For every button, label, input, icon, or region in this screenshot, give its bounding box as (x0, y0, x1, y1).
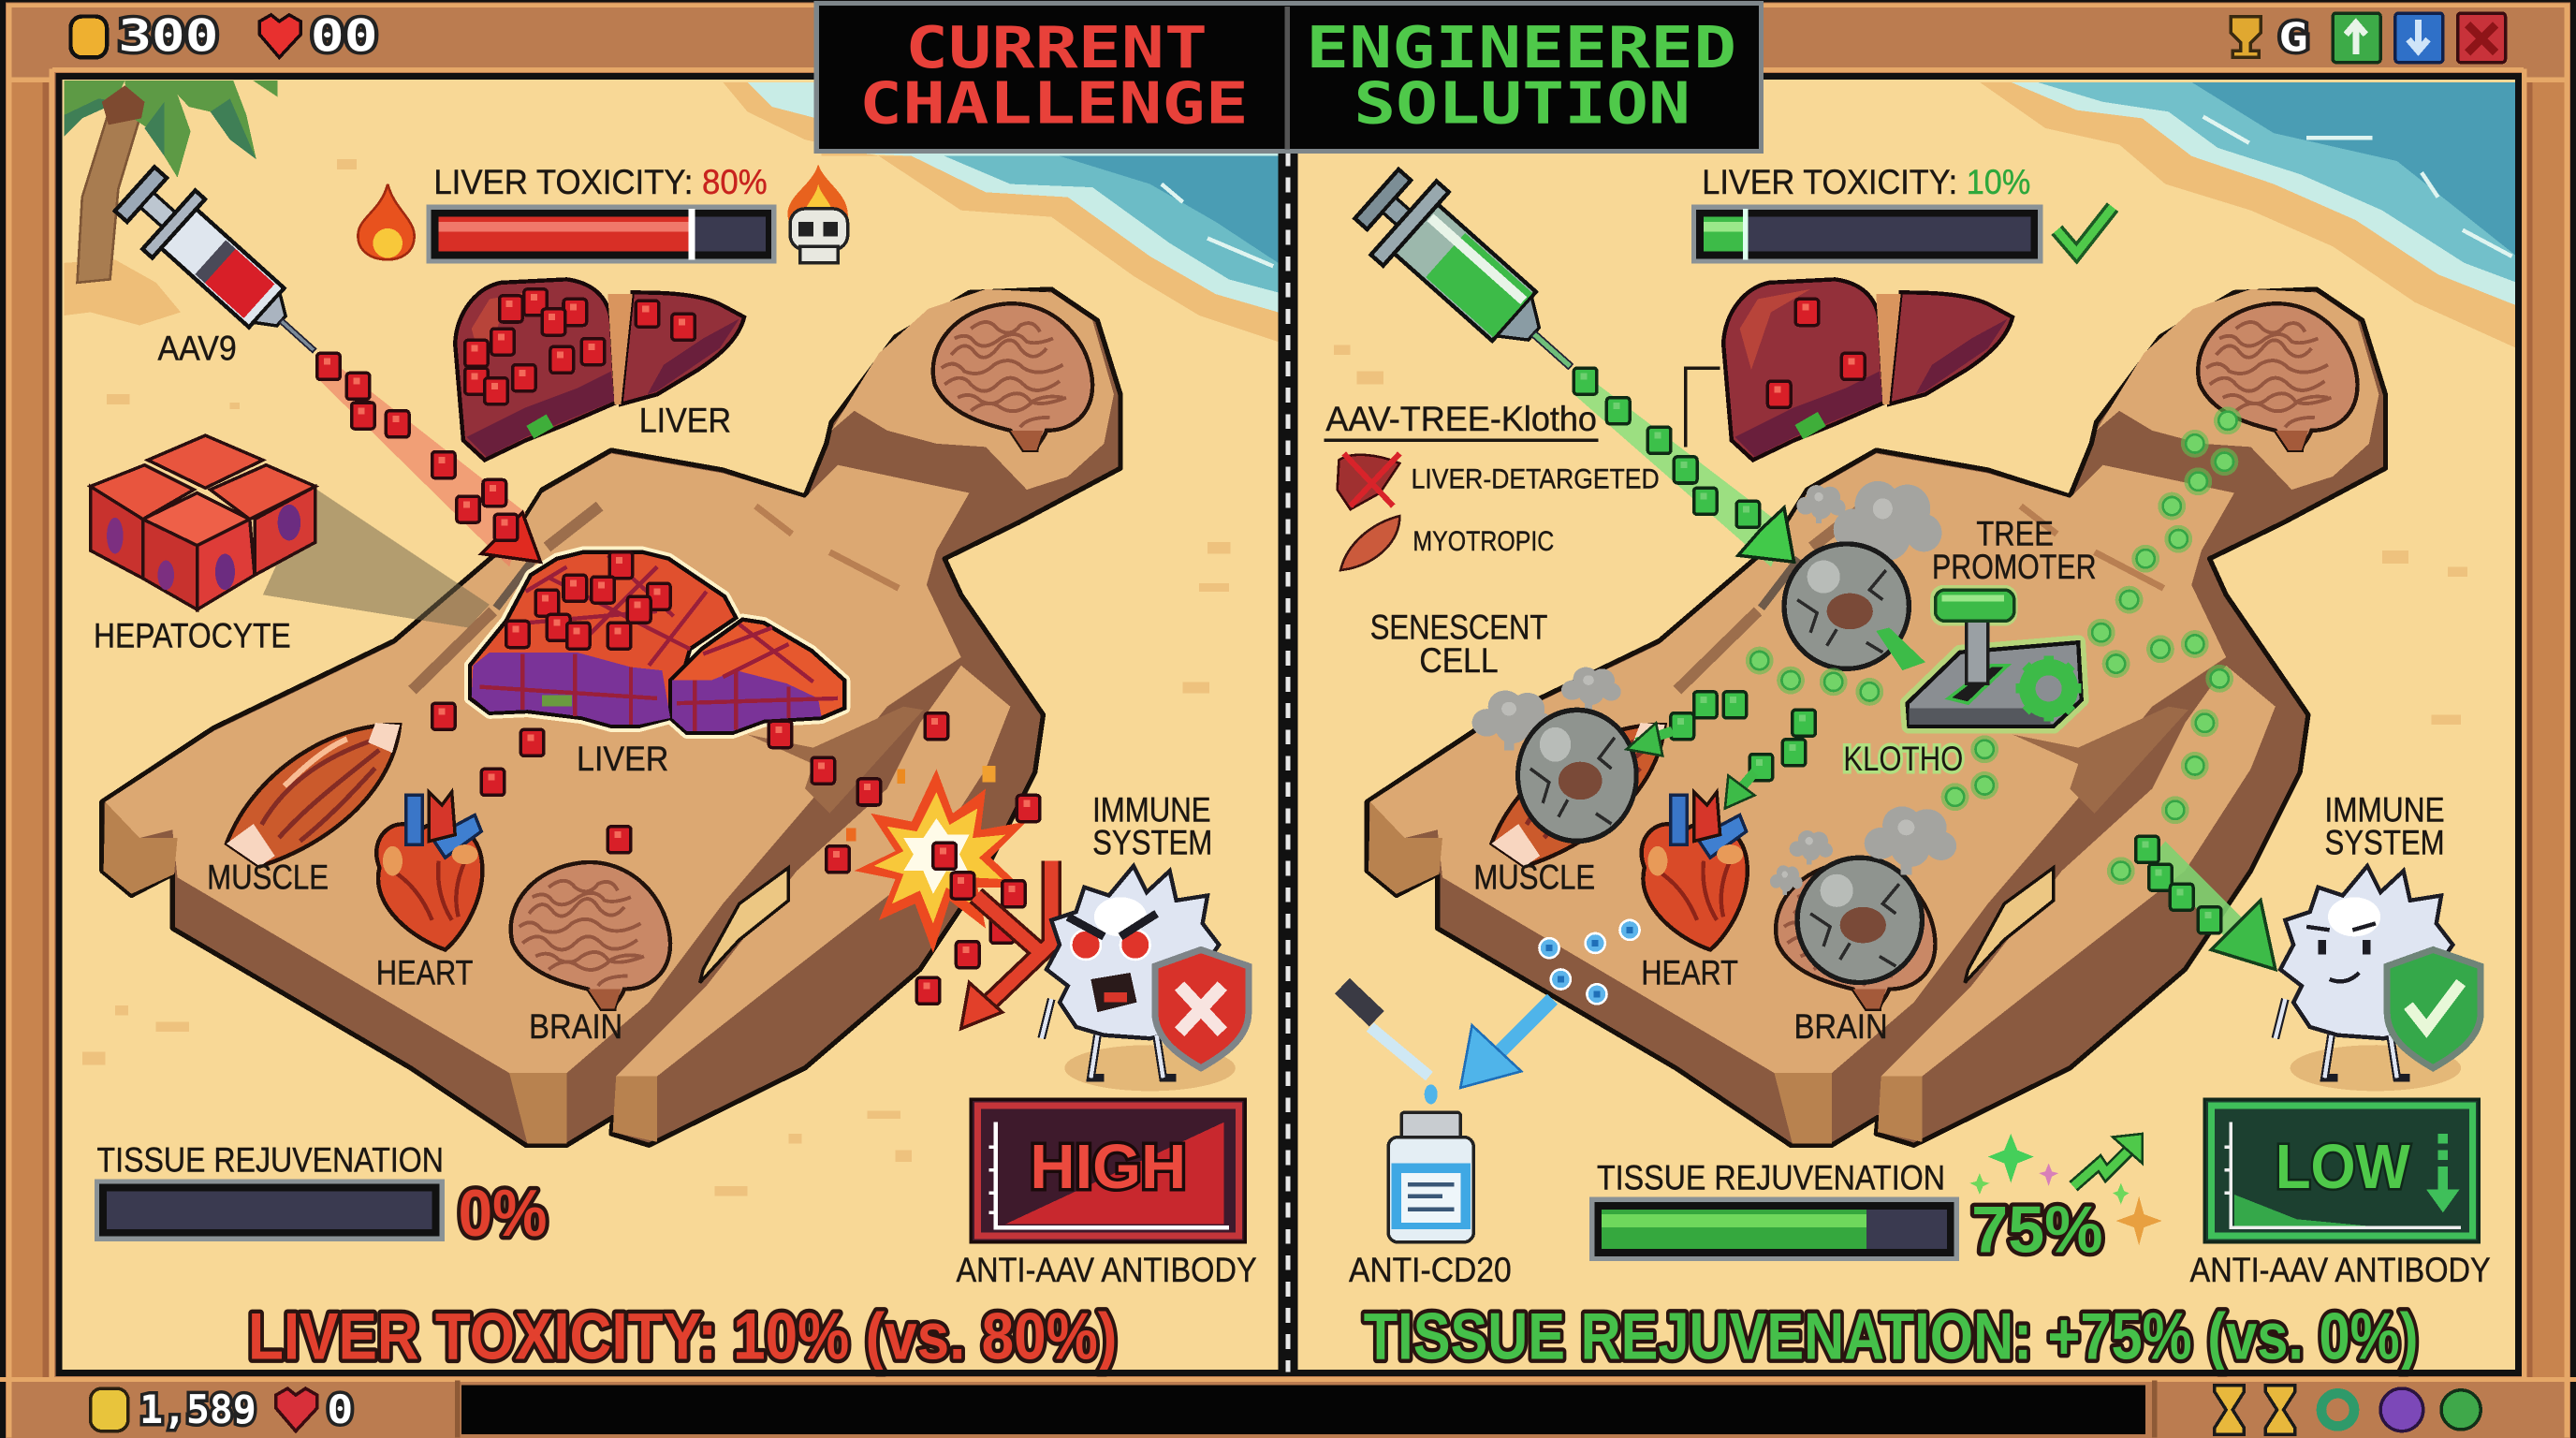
virus dots trail (317, 353, 506, 522)
label: anti-aav antibody: ANTI-AAV ANTIBODY (2190, 1251, 2491, 1289)
header: current challenge: CHALLENGE (859, 71, 1249, 138)
header: current challenge: CURRENT (905, 15, 1208, 81)
liver toxicity readout: LIVER TOXICITY: 10% (1702, 163, 2030, 201)
label: muscle: MUSCLE (1473, 858, 1595, 897)
tree promoter label (1932, 515, 2097, 586)
high antibody panel (971, 1099, 1245, 1242)
label: immune system: SYSTEM (2324, 824, 2445, 862)
immune shadow (2291, 1045, 2461, 1091)
blue arrow (1460, 999, 1553, 1088)
body, challenge panel (102, 289, 1120, 1145)
button: close (2458, 13, 2506, 63)
label: senescent cell (1370, 609, 1547, 680)
label: liver: LIVER (639, 402, 731, 440)
header: engineered solution: SOLUTION (1354, 71, 1690, 138)
senescent cell on muscle (1518, 710, 1636, 841)
low antibody panel (2204, 1099, 2479, 1242)
syringe AAV9 (109, 160, 341, 380)
takeaway: liver toxicity: LIVER TOXICITY: 10% (vs. 80%) (248, 1299, 1117, 1372)
muscle (205, 712, 430, 876)
senescent cell on brain (1797, 858, 1922, 983)
high antibody panel: HIGH (1030, 1133, 1186, 1202)
red rejection arrow (961, 861, 1051, 1029)
label: liver on body: LIVER (577, 740, 668, 778)
calm immune cell (2276, 866, 2452, 1078)
rejuvenation bar 0% (97, 1181, 442, 1239)
label: tissue rejuvenation: TISSUE REJUVENATION (1597, 1159, 1945, 1197)
header: current challenge (859, 15, 1249, 138)
label: muscle: MUSCLE (207, 858, 329, 897)
green arrow to immune cell (2136, 836, 2276, 970)
icon: liver crossed (1338, 453, 1399, 509)
icon: heart (276, 1388, 317, 1431)
tree promoter label: PROMOTER (1932, 548, 2097, 586)
label: immune system: SYSTEM (1092, 824, 1212, 862)
klotho dots (1671, 406, 2242, 885)
top hud right (2231, 13, 2506, 63)
takeaway: tissue rejuvenation: TISSUE REJUVENATION: +75% (vs. 0%) (1364, 1299, 2419, 1372)
icon: flaming skull (787, 165, 848, 263)
damaged liver on body (470, 552, 844, 733)
panel: current challenge (61, 79, 1281, 1372)
header: engineered solution (1306, 15, 1736, 138)
vial anti-cd20 (1388, 1112, 1473, 1242)
senescent cell upper (1784, 544, 1909, 668)
label: immune system (2324, 791, 2445, 862)
brain in head (2198, 303, 2358, 450)
label: tissue rejuvenation: TISSUE REJUVENATION (97, 1140, 444, 1179)
label: anti-aav antibody: ANTI-AAV ANTIBODY (956, 1251, 1257, 1289)
smoke clouds lower (1770, 806, 1956, 895)
icon: trophy (2231, 17, 2261, 57)
icon: muscle small (1340, 516, 1399, 570)
green beam (1573, 381, 1788, 567)
button: down (2395, 13, 2443, 63)
icon: check fill (2056, 207, 2113, 253)
label: immune system: IMMUNE (1092, 791, 1211, 829)
label: hepatocyte: HEPATOCYTE (94, 617, 291, 655)
heart (1642, 792, 1748, 949)
header: engineered solution: ENGINEERED (1306, 15, 1736, 81)
red dots scattered (432, 703, 1040, 1004)
connector line (1686, 368, 1720, 447)
syringe green (1344, 157, 1603, 404)
0 percent: 0% (459, 1176, 547, 1250)
bottom hud (91, 1386, 2481, 1434)
beach and sea, left panel (64, 82, 1278, 342)
icon: heart (259, 15, 300, 57)
sparkles and trend arrow (1969, 1134, 2162, 1245)
muscle (1470, 712, 1695, 876)
arrow into liver (481, 513, 540, 562)
rejuvenation bar 75% (1592, 1199, 1956, 1258)
button: up (2333, 13, 2380, 63)
virus dots in liver (506, 552, 670, 649)
icon: coin (91, 1388, 128, 1431)
immune shadow (1064, 1045, 1236, 1091)
label: brain: BRAIN (1794, 1007, 1888, 1046)
header banner (816, 4, 1761, 151)
explosion (846, 766, 1027, 953)
panel: engineered solution (1295, 79, 2519, 1372)
liver toxicity readout: LIVER TOXICITY: 80% (433, 163, 768, 201)
75 percent: 75% (1971, 1192, 2103, 1266)
icon: hourglass (2215, 1386, 2244, 1434)
score 300: 300 (118, 10, 218, 62)
beach and sea, right panel (1980, 82, 2517, 348)
label: senescent cell: CELL (1419, 641, 1499, 680)
icon: ring (2321, 1393, 2354, 1426)
score 1,589: 1,589 (139, 1387, 256, 1432)
brain (511, 862, 670, 1009)
label: AAV9: AAV9 (157, 329, 237, 367)
shield with x (1155, 949, 1249, 1068)
tree promoter label: TREE (1976, 515, 2054, 553)
icon: purple orb (2380, 1388, 2423, 1431)
green arrow head (1738, 507, 1794, 562)
green vector dots (1573, 368, 1760, 527)
label: myotropic: MYOTROPIC (1412, 526, 1554, 557)
green arrow from switch to cell (1876, 627, 1925, 670)
label: immune system: IMMUNE (2324, 791, 2445, 829)
sand specks (82, 159, 1231, 1196)
label: brain: BRAIN (529, 1007, 622, 1046)
upper liver with few dots (1723, 279, 2012, 460)
liver toxicity bar 10% (1694, 207, 2041, 261)
liver toxicity bar 80% (429, 207, 774, 261)
hepatocyte cubes (91, 435, 315, 609)
hepatocyte shadow (263, 487, 490, 627)
icon: hourglass 2 (2265, 1386, 2295, 1434)
heart (376, 792, 482, 949)
upper liver with dots (455, 279, 744, 460)
lives 00: 00 (311, 10, 378, 62)
sand specks (1334, 345, 2467, 725)
message bar (461, 1386, 2145, 1434)
icon: coin (70, 17, 107, 57)
body, solution panel (1367, 289, 2385, 1145)
top hud left (70, 10, 378, 62)
icon: check (2056, 207, 2113, 253)
icon: green orb (2441, 1390, 2481, 1430)
label: senescent cell: SENESCENT (1370, 609, 1547, 647)
palm tree (64, 81, 278, 283)
angry immune cell (1042, 866, 1219, 1078)
icon: flame (358, 184, 415, 259)
label: liver-detargeted: LIVER-DETARGETED (1412, 463, 1660, 494)
icon: G badge: G (2278, 14, 2308, 60)
brain in head (933, 303, 1092, 450)
label: anti-cd20: ANTI-CD20 (1349, 1251, 1512, 1289)
lives 0: 0 (327, 1387, 353, 1432)
shield with check (2387, 949, 2481, 1068)
label: heart: HEART (376, 953, 473, 991)
toxicity beam (320, 365, 526, 567)
label: aav-tree-klotho: AAV-TREE-Klotho (1325, 400, 1597, 438)
dropper (1342, 986, 1438, 1104)
smoke clouds left (1472, 668, 1621, 750)
tree promoter switch (1908, 585, 2082, 726)
brain lower (1776, 862, 1936, 1009)
small green arrows (1627, 723, 1754, 809)
low antibody panel: LOW (2276, 1133, 2410, 1202)
anti-cd20 blue dots (1540, 920, 1640, 1004)
smoke clouds upper (1796, 481, 1942, 571)
label: heart: HEART (1641, 953, 1738, 991)
label: immune system (1092, 791, 1212, 862)
label: klotho: KLOTHO (1843, 740, 1963, 778)
